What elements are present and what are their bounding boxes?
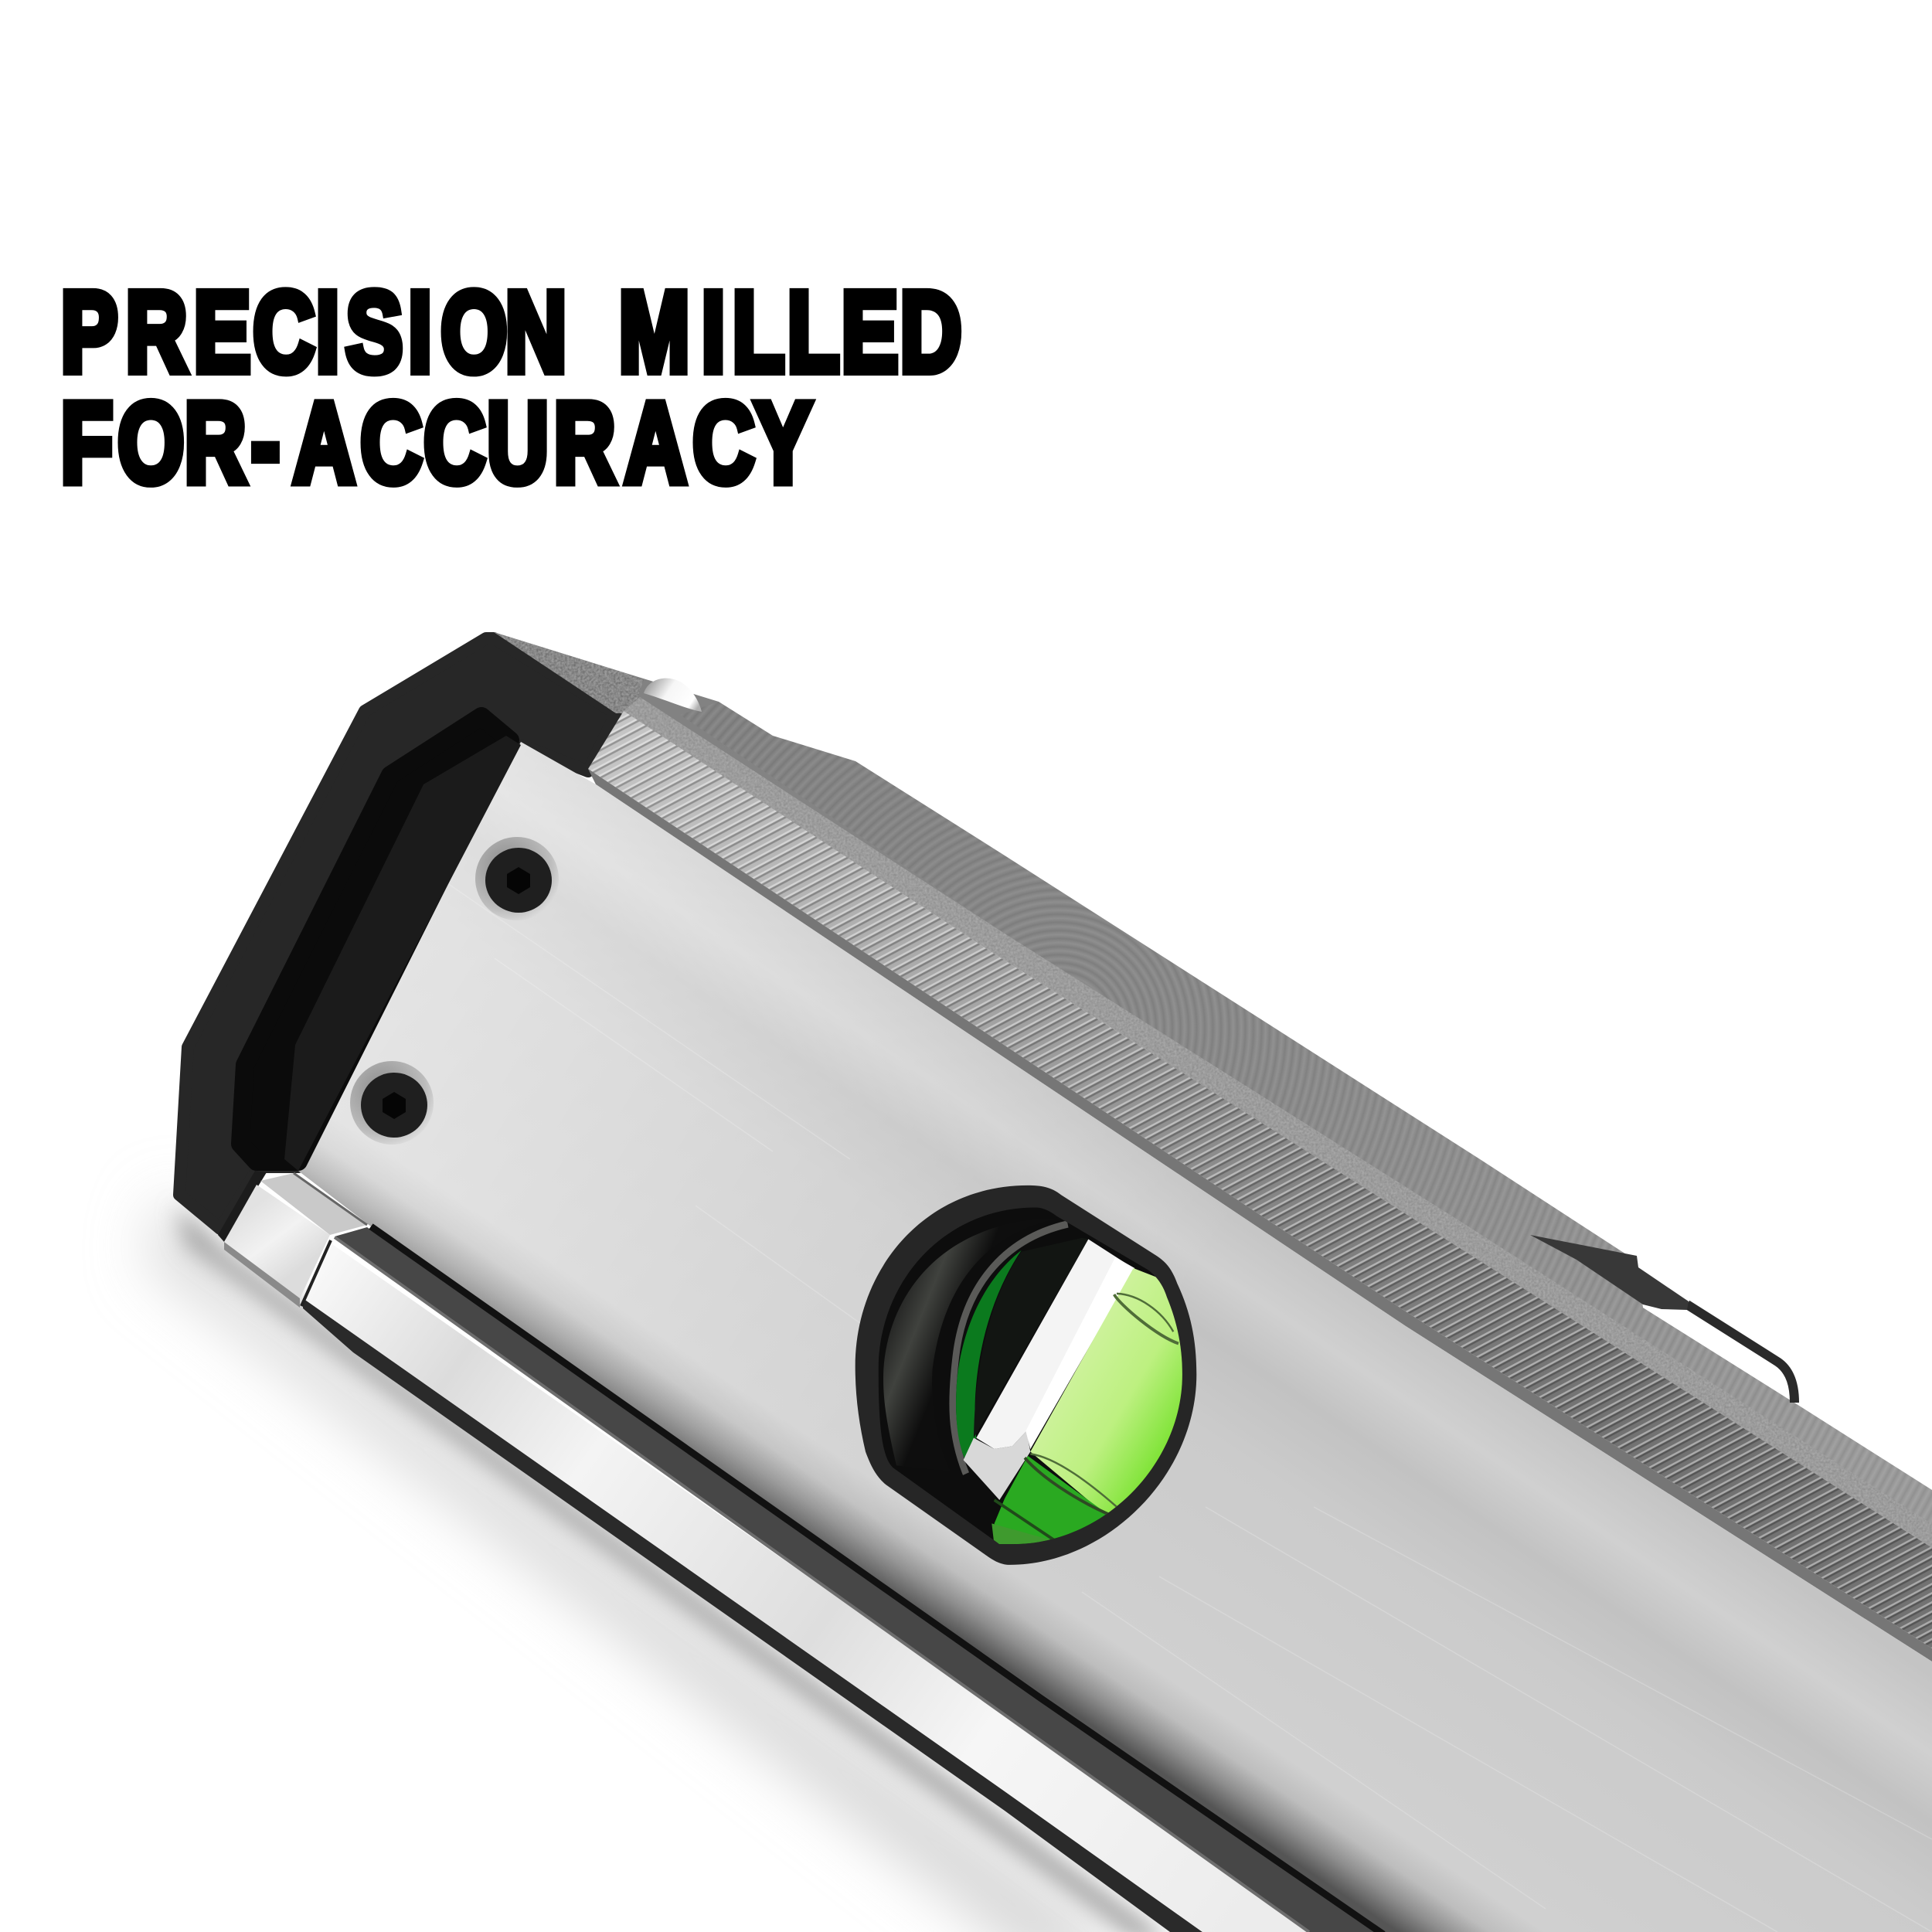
fine-ribbed milled band bbox=[588, 711, 1932, 1648]
dark wedge behind end cap bbox=[494, 632, 644, 713]
soft ground shadow under the level bbox=[147, 1194, 1170, 1932]
hanging hook bbox=[1530, 1235, 1797, 1404]
end cap recess bbox=[240, 716, 521, 1171]
grey curved top face with milled arcs bbox=[494, 632, 1932, 1553]
left glass grey reflection bbox=[964, 1431, 1030, 1500]
vial lines bbox=[995, 1294, 1179, 1542]
polished chrome strip bbox=[303, 1244, 1309, 1932]
cap lower strip bbox=[218, 1171, 267, 1242]
white vial band bbox=[976, 1240, 1134, 1449]
block seam line bbox=[294, 1173, 367, 1225]
chrome end block bbox=[224, 1173, 367, 1308]
steel ball detail bbox=[644, 679, 702, 712]
lower bevel rim bbox=[588, 769, 1932, 1662]
vial interior bbox=[878, 1207, 1182, 1544]
black channel line bbox=[371, 1226, 1383, 1932]
vial outer frame bbox=[855, 1185, 1196, 1565]
cup highlight bbox=[883, 1229, 993, 1465]
level vial window bbox=[855, 1185, 1208, 1565]
lower screw bbox=[350, 1061, 434, 1145]
black channel band bbox=[335, 1227, 1383, 1932]
heading line 1: PRECISION MILLED bbox=[61, 267, 961, 396]
level lower dark edge bbox=[303, 1298, 1202, 1932]
heading line 2: FOR-ACCURACY bbox=[61, 379, 811, 506]
textured ring bbox=[953, 1224, 1068, 1474]
dark tube bbox=[974, 1410, 976, 1437]
heading: precision milled for-accuracy bbox=[61, 267, 961, 506]
textured strip bbox=[624, 697, 1932, 1549]
spirit level product bbox=[179, 632, 1932, 1932]
upper screw bbox=[475, 837, 559, 920]
light green liquid bbox=[1030, 1268, 1182, 1515]
dark green lower liquid bbox=[994, 1456, 1107, 1544]
green sliver bbox=[956, 1250, 1022, 1458]
brushed aluminium face bbox=[298, 742, 1932, 1932]
rubber end cap body bbox=[179, 638, 616, 1229]
